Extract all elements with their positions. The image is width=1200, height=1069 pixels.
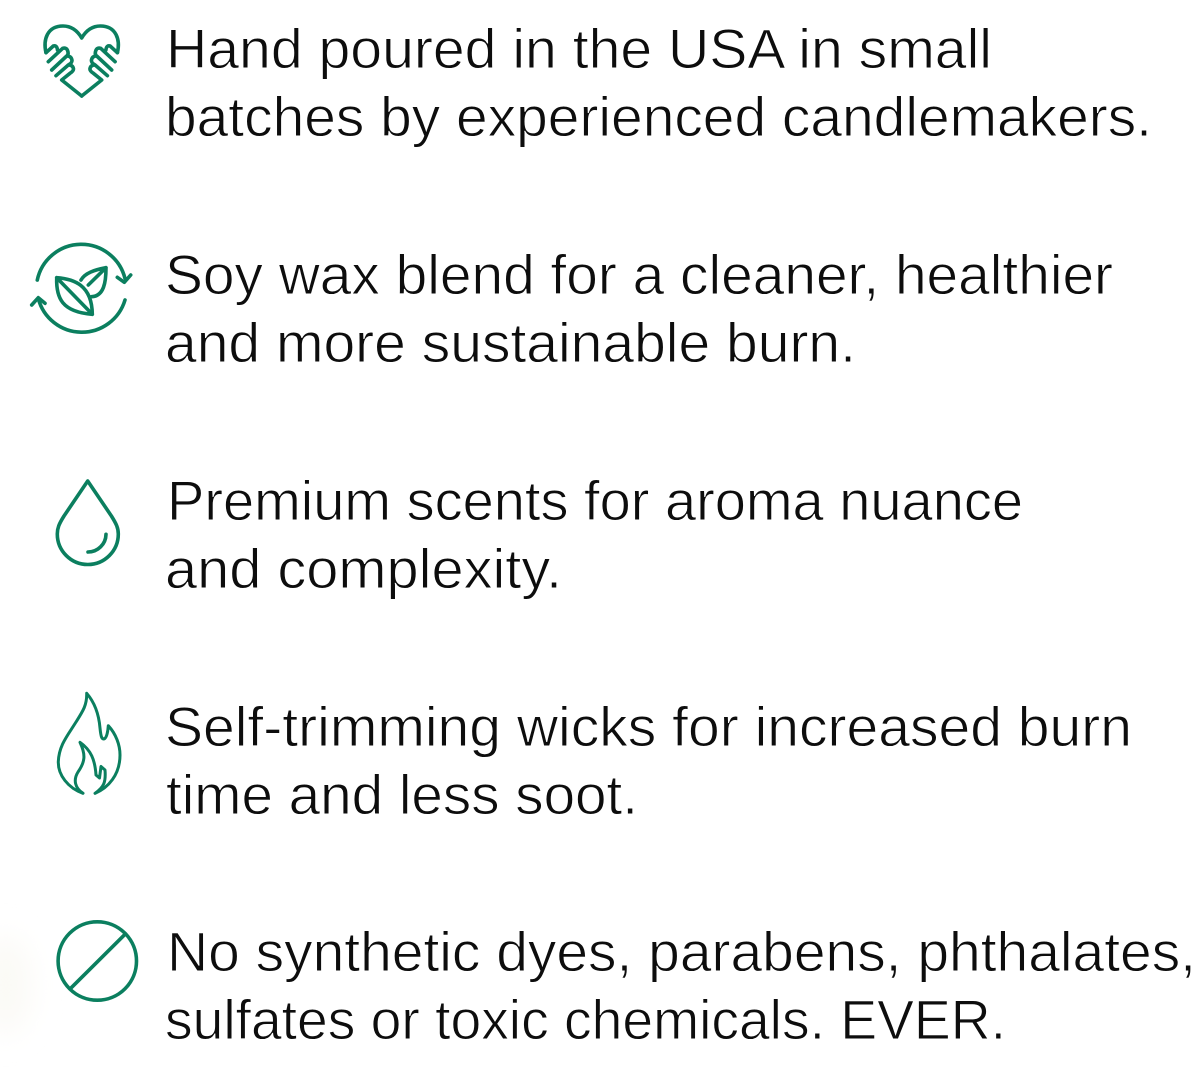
icon: leaves in recycling arrows	[32, 244, 131, 332]
text: no synthetic dyes	[165, 920, 1196, 1051]
text: no synthetic dyes: sulfates or toxic chemicals. EVER.	[165, 988, 1006, 1051]
icon: water drop	[57, 481, 118, 564]
text: self-trimming wicks	[165, 695, 1132, 826]
icon: heart held by hands	[45, 26, 118, 96]
text: premium scents	[165, 469, 1023, 600]
icon: prohibited sign	[58, 922, 136, 1000]
text: premium scents: Premium scents for aroma nuance	[167, 469, 1023, 532]
text: soy wax: and more sustainable burn.	[165, 311, 856, 374]
text: self-trimming wicks: time and less soot.	[166, 763, 638, 826]
icon: flame	[58, 693, 120, 793]
text: premium scents: and complexity.	[165, 537, 562, 600]
text: hand poured	[165, 17, 1152, 148]
text: self-trimming wicks: Self-trimming wicks for increased burn	[165, 695, 1132, 758]
text: soy wax	[165, 243, 1113, 374]
text: no synthetic dyes: No synthetic dyes, parabens, phthalates,	[167, 920, 1196, 983]
text: hand poured: batches by experienced candlemakers.	[165, 85, 1152, 148]
text: soy wax: Soy wax blend for a cleaner, healthier	[165, 243, 1113, 306]
text: hand poured: Hand poured in the USA in small	[166, 17, 992, 80]
